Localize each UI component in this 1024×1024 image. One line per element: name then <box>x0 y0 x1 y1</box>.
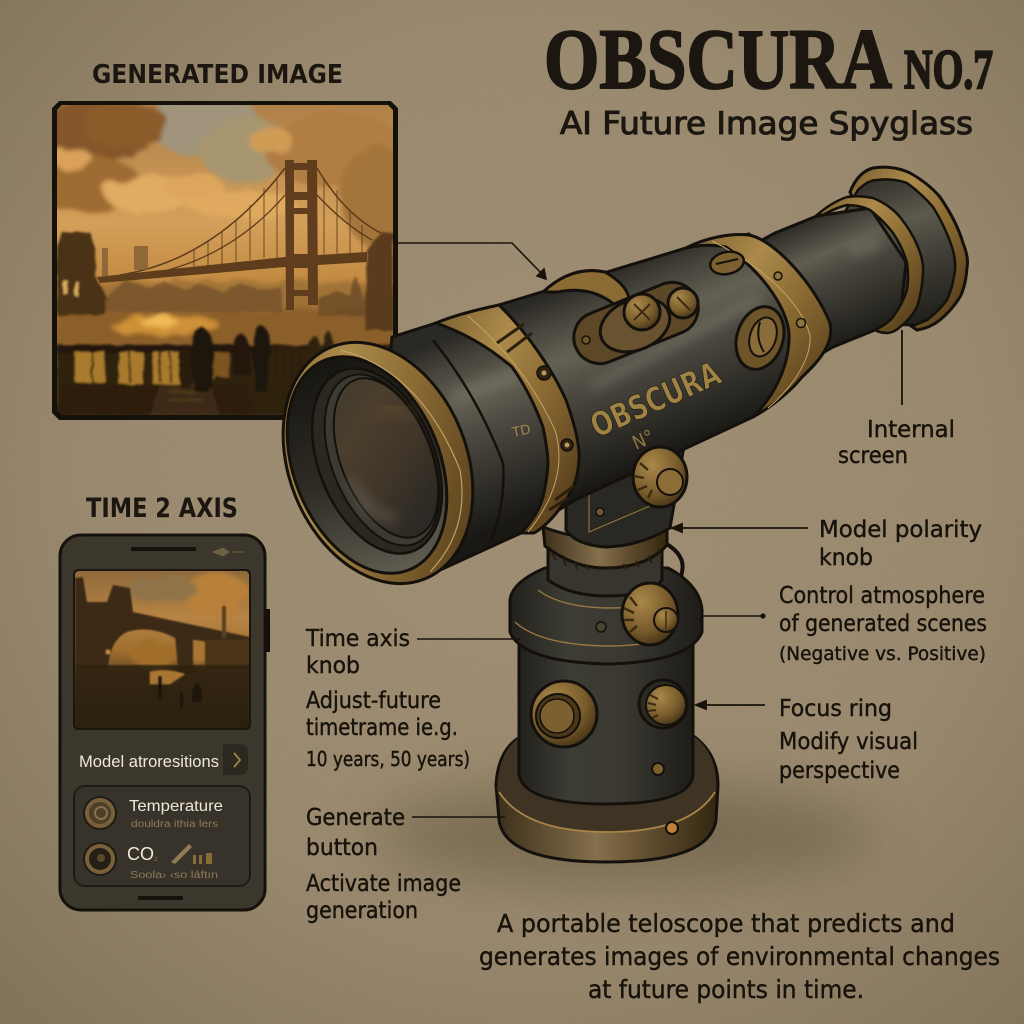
column <box>519 640 693 804</box>
readout panel <box>74 786 250 886</box>
tube group <box>249 167 968 612</box>
description text <box>479 909 1000 1004</box>
tube grooves <box>433 340 503 543</box>
eyepiece flange rim <box>850 167 968 330</box>
tube highlights <box>455 242 880 395</box>
model label: Model atroresitions <box>79 752 219 771</box>
slotted screw <box>708 249 746 277</box>
label: time axis knob <box>305 626 470 771</box>
knob plate <box>566 275 706 371</box>
label: internal screen: screen <box>838 443 908 469</box>
collar knob <box>622 583 678 645</box>
label: focus ring: perspective <box>779 758 900 784</box>
strap over tube <box>543 271 629 306</box>
panel: phone <box>60 535 270 910</box>
collar <box>510 568 702 664</box>
label: control atmosphere: (Negative vs. Positive) <box>779 643 986 665</box>
engraved OBSCURA: OBSCURA <box>584 354 726 445</box>
leader line: image to telescope <box>398 243 546 279</box>
chevron button <box>223 744 248 775</box>
eyepiece flare <box>840 179 955 325</box>
base <box>496 737 718 862</box>
temperature text: Temperature <box>129 798 223 815</box>
title: OBSCURA <box>544 11 892 107</box>
line: generate <box>412 816 505 818</box>
engraved No: N° <box>629 426 658 455</box>
front ring <box>249 314 507 612</box>
label: generate button: button <box>306 835 378 861</box>
label: control atmosphere: Control atmosphere <box>779 583 985 609</box>
brass band rear <box>686 235 831 417</box>
knurled knob <box>639 680 687 728</box>
label: generate button: generation <box>306 898 418 924</box>
heading: generated image: GENERATED IMAGE <box>92 60 343 90</box>
eyepiece tube <box>740 208 906 372</box>
co2 text: Soola› ‹so láftın <box>130 870 218 881</box>
temperature text <box>129 798 223 830</box>
button large <box>531 681 597 747</box>
brass band front <box>436 305 579 533</box>
panel: generated image <box>52 101 398 420</box>
neck ring <box>543 522 667 570</box>
arrow: model polarity <box>672 524 808 532</box>
label: internal screen: Internal <box>867 417 955 443</box>
bridge <box>97 160 381 310</box>
co2 dial <box>83 842 117 876</box>
label: focus ring <box>779 696 918 784</box>
temperature dial <box>83 796 117 830</box>
eyepiece ring <box>817 196 923 333</box>
phone screen image <box>73 569 251 730</box>
label: generate button: Activate image <box>306 871 461 897</box>
label: focus ring: Focus ring <box>779 696 892 722</box>
label: generate button: Generate <box>306 805 405 831</box>
main tube <box>380 234 829 570</box>
engraved TD: TD <box>510 420 532 440</box>
label: time axis knob: timetrame ie.g. <box>306 715 458 741</box>
label: model polarity <box>819 517 982 571</box>
telescope illustration <box>249 167 968 862</box>
stand <box>496 440 718 862</box>
description text: at future points in time. <box>588 975 864 1004</box>
description text: generates images of environmental changes <box>479 942 1000 971</box>
label: time axis knob: 10 years, 50 years) <box>306 747 470 771</box>
city and ruins <box>57 232 393 415</box>
label: time axis knob: Time axis <box>305 626 410 652</box>
pencil and bars icon <box>171 844 212 864</box>
co2 text: CO₂ <box>127 844 158 864</box>
subtitle: AI Future Image Spyglass <box>560 106 973 142</box>
label: generate button <box>306 805 461 924</box>
label: control atmosphere <box>779 583 987 665</box>
temperature text: douldra ithia lers <box>131 819 218 830</box>
co2 text <box>127 844 218 881</box>
neck loop <box>665 543 683 590</box>
heading: time 2 axis: TIME 2 AXIS <box>86 493 238 524</box>
neck <box>548 550 662 596</box>
label: model polarity: knob <box>819 545 873 571</box>
label: control atmosphere: of generated scenes <box>779 611 987 637</box>
line: control atmosphere <box>702 614 765 618</box>
mount bracket <box>566 440 685 547</box>
arrow: focus ring <box>696 701 765 709</box>
label: time axis knob: knob <box>306 653 360 679</box>
leader line: internal screen <box>901 330 903 405</box>
label: model polarity: Model polarity <box>819 517 982 543</box>
description text: A portable teloscope that predicts and <box>497 909 955 938</box>
label: time axis knob: Adjust-future <box>306 688 441 714</box>
label: focus ring: Modify visual <box>779 729 918 755</box>
small rivets <box>652 763 664 775</box>
tube knob <box>633 447 687 507</box>
line: time axis <box>417 638 520 640</box>
label: internal screen <box>838 417 955 469</box>
round plate knob <box>728 300 792 376</box>
